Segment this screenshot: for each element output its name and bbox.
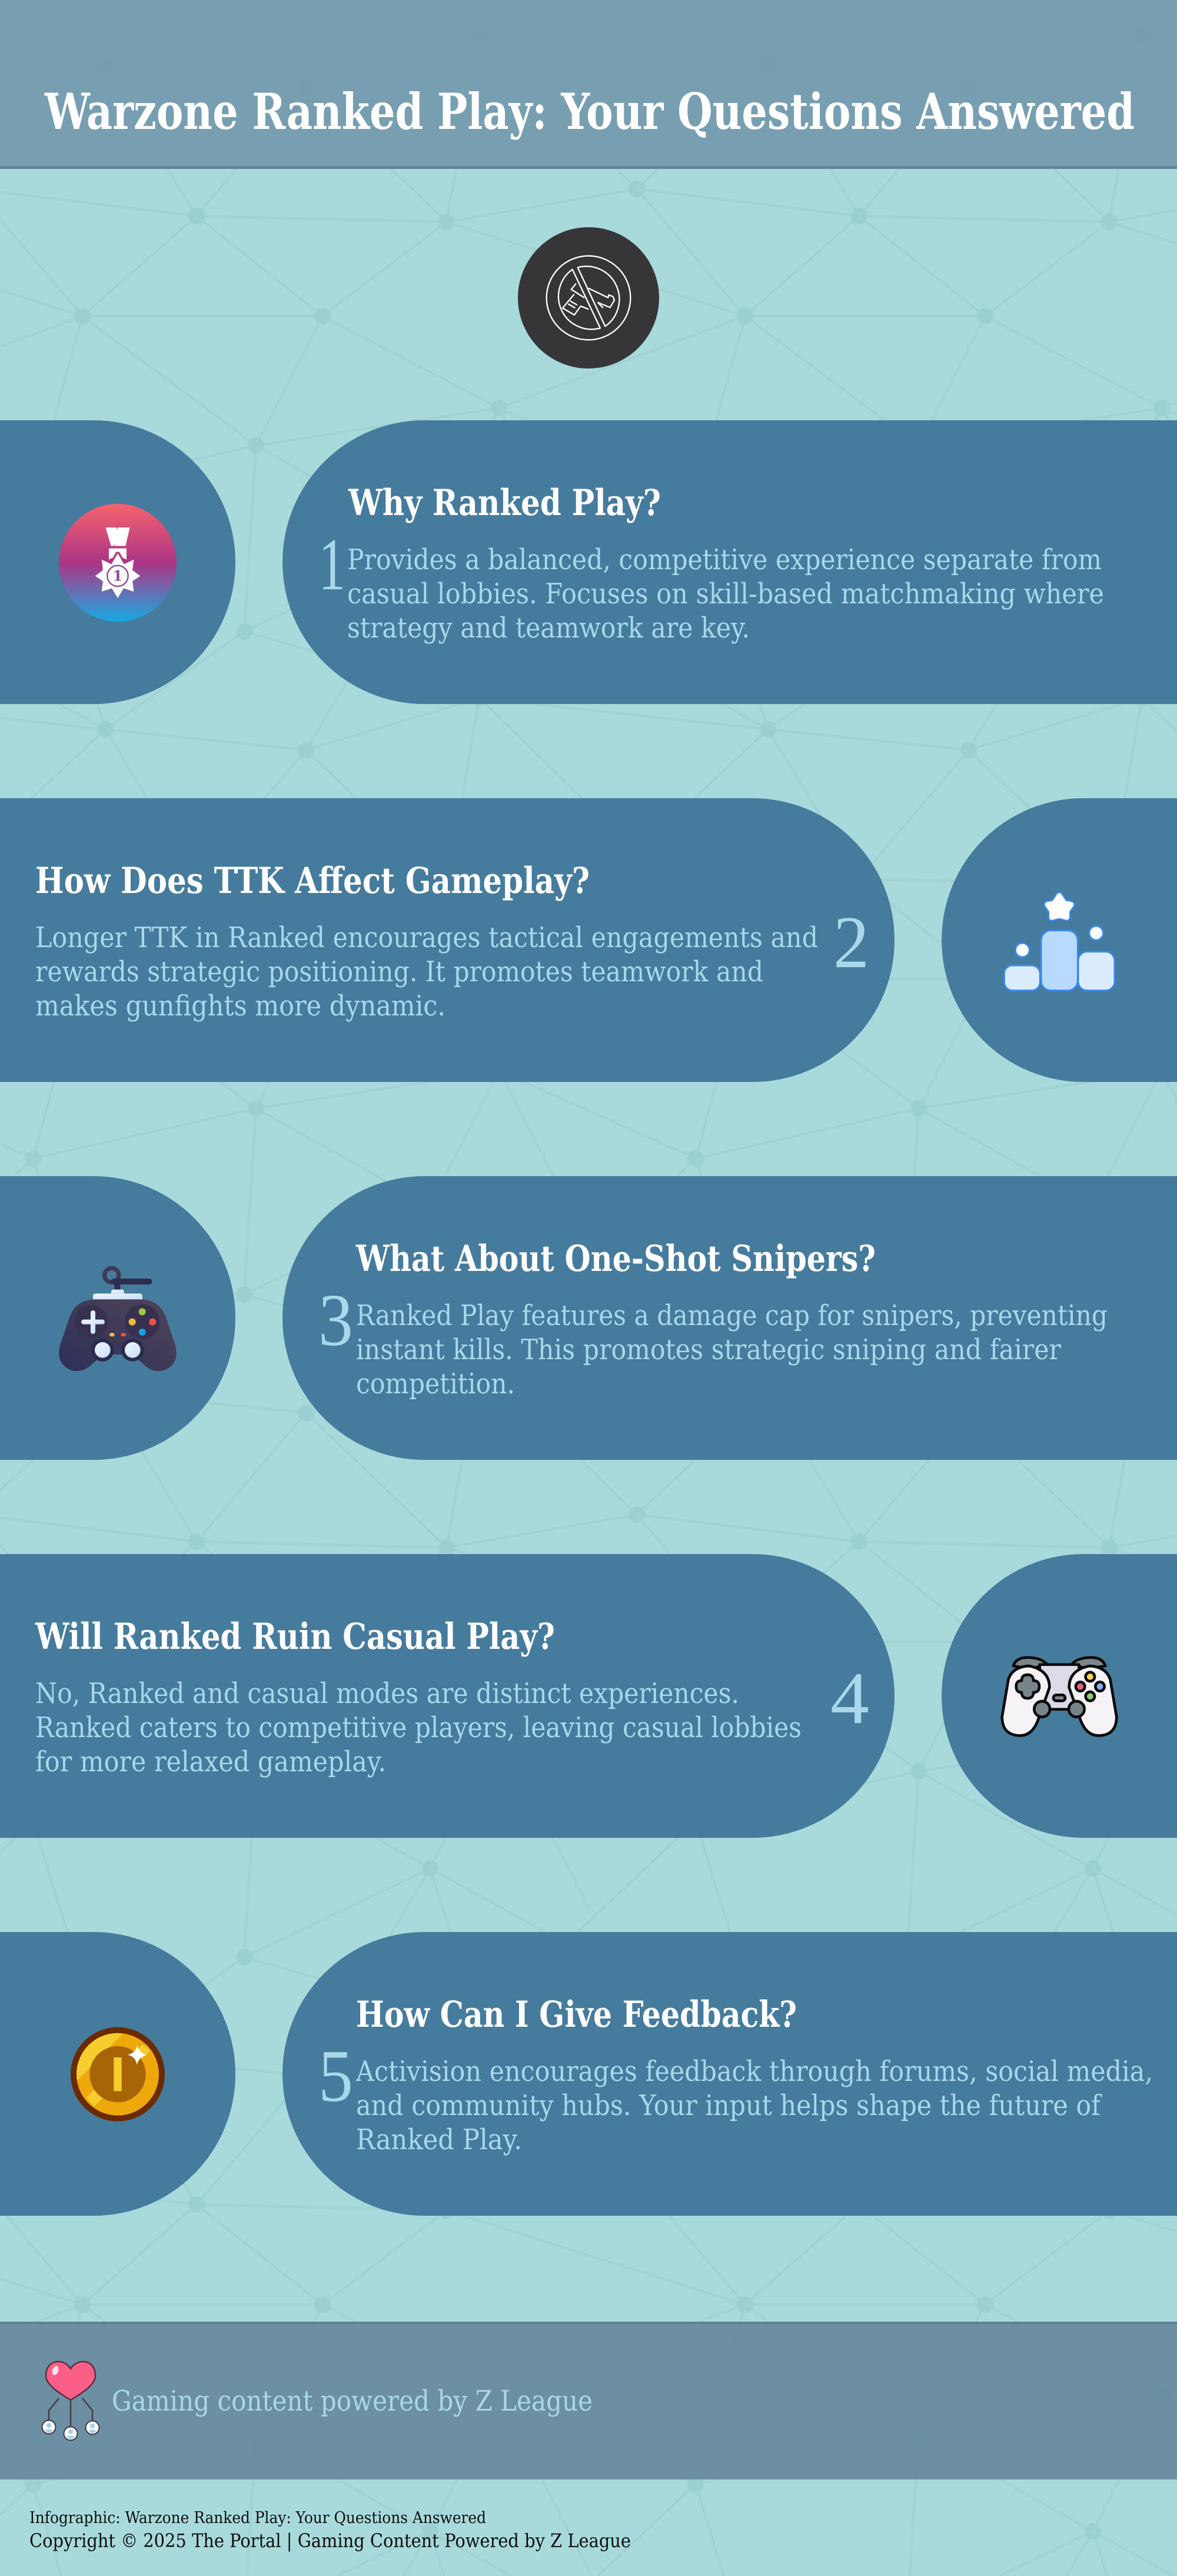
icon: heart with network [42, 2362, 99, 2441]
number 2: 2 [833, 902, 869, 984]
text panel 5 [282, 1932, 1177, 2216]
panel: row 4 [0, 1554, 1177, 1838]
body 4 [35, 1677, 802, 1778]
heading 2: How Does TTK Affect Gameplay? [35, 860, 590, 902]
body 1 [347, 543, 1104, 645]
icon: no guns badge [518, 227, 659, 369]
header banner [0, 0, 1177, 169]
icon panel 3 [0, 1176, 235, 1460]
text panel 1 [282, 420, 1177, 704]
icon: medal: 1 [113, 567, 122, 585]
number 4: 4 [830, 1658, 869, 1740]
caption: Infographic: Warzone Ranked Play: Your Questions Answered [29, 2509, 486, 2527]
text panel 3 [282, 1176, 1177, 1460]
panel: row 5 [0, 1932, 1177, 2216]
panel: row 2 [0, 798, 1177, 1082]
icon: medal [59, 504, 177, 622]
copyright: Copyright © 2025 The Portal | Gaming Content Powered by Z League [29, 2529, 631, 2552]
icon: gold coin [71, 2027, 165, 2122]
body 1: casual lobbies. Focuses on skill-based matchmaking where [347, 577, 1104, 610]
body 2: Longer TTK in Ranked encourages tactical engagements and [35, 921, 818, 954]
icon: white gamepad [1002, 1658, 1116, 1735]
text panel 2 [0, 798, 895, 1082]
heading 5: How Can I Give Feedback? [356, 1994, 797, 2036]
body 1: Provides a balanced, competitive experience separate from [347, 543, 1102, 576]
body 2: makes gunfights more dynamic. [35, 990, 445, 1023]
footer banner [0, 2322, 1177, 2479]
body 4: No, Ranked and casual modes are distinct experiences. [35, 1677, 739, 1710]
body 4: for more relaxed gameplay. [35, 1745, 386, 1778]
icon panel 2 [942, 798, 1177, 1082]
heading 1: Why Ranked Play? [348, 482, 661, 524]
icon panel 1 [0, 420, 235, 704]
icon: podium [1004, 896, 1115, 991]
body 5: and community hubs. Your input helps shape the future of [356, 2089, 1102, 2122]
body 1: strategy and teamwork are key. [347, 612, 750, 645]
icon: wired gamepad [59, 1268, 177, 1371]
heading 3: What About One-Shot Snipers? [355, 1238, 876, 1280]
body 3: competition. [356, 1367, 515, 1400]
footer tagline: Gaming content powered by Z League [112, 2385, 593, 2418]
panel: row 1 [0, 420, 1177, 704]
text panel 4 [0, 1554, 895, 1838]
body 5: Ranked Play. [356, 2123, 522, 2156]
number 3: 3 [318, 1280, 353, 1362]
body 2: rewards strategic positioning. It promotes teamwork and [35, 955, 763, 988]
body 3 [356, 1299, 1108, 1400]
body 5 [355, 2055, 1153, 2156]
panel: row 3 [0, 1176, 1177, 1460]
body 2 [35, 921, 818, 1023]
icon panel 5 [0, 1932, 235, 2216]
caption and copyright [29, 2509, 631, 2552]
number 1: 1 [318, 524, 345, 606]
body 4: Ranked caters to competitive players, leaving casual lobbies [35, 1711, 802, 1744]
icon panel 4 [942, 1554, 1177, 1838]
body 3: instant kills. This promotes strategic sniping and fairer [356, 1333, 1061, 1366]
number 5: 5 [318, 2036, 353, 2117]
heading 4: Will Ranked Ruin Casual Play? [35, 1616, 555, 1658]
